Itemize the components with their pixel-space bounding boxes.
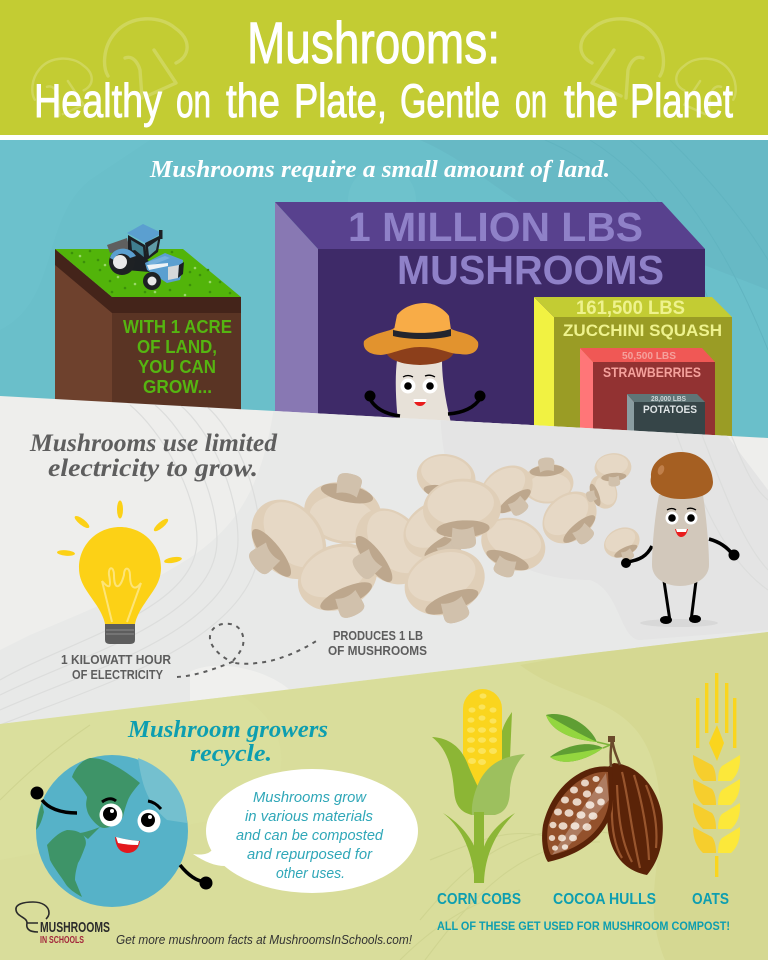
character: mushroom with legs xyxy=(599,452,740,627)
heading: land: Mushrooms require a small amount of land. xyxy=(149,157,610,183)
held mushroom xyxy=(599,522,647,568)
title xyxy=(34,11,733,127)
block: mushrooms: MUSHROOMS xyxy=(397,247,664,293)
label: produces 1 lb xyxy=(328,629,427,658)
callout: speech bubble: and can be composted xyxy=(236,828,384,844)
title: Gentle xyxy=(400,74,500,127)
heading: electricity: electricity to grow. xyxy=(48,455,258,482)
background: teal land section xyxy=(0,140,768,460)
callout: speech bubble: in various materials xyxy=(245,809,373,825)
icon: tractor xyxy=(107,224,184,290)
heading: recycle: recycle. xyxy=(190,741,272,767)
labels: compost materials: OATS xyxy=(692,891,729,908)
land label: GROW... xyxy=(143,377,212,397)
icon: light bulb xyxy=(57,500,182,644)
block: zucchini squash: ZUCCHINI SQUASH xyxy=(563,321,722,340)
title: Planet xyxy=(630,74,733,127)
callout: speech bubble xyxy=(193,769,418,893)
block: strawberries: STRAWBERRIES xyxy=(603,364,701,380)
labels: compost materials: CORN COBS xyxy=(437,891,521,908)
icon: corn xyxy=(432,689,525,883)
land label: OF LAND, xyxy=(137,337,217,357)
block: mushrooms xyxy=(275,202,705,444)
label: produces 1 lb: OF MUSHROOMS xyxy=(328,644,427,658)
label: kilowatt hour xyxy=(61,653,171,682)
block: potatoes: 28,000 LBS xyxy=(651,396,686,403)
arrow: dashed path xyxy=(177,624,318,677)
icon: oats xyxy=(693,673,740,877)
character: earth globe xyxy=(30,755,212,907)
label: kilowatt hour: OF ELECTRICITY xyxy=(72,668,164,682)
block: potatoes xyxy=(627,394,705,445)
character: farmer mushroom xyxy=(364,303,486,440)
text: footer: Get more mushroom facts at MushroomsInSchools.com! xyxy=(116,933,412,947)
title: the xyxy=(564,74,618,127)
icon: header mushrooms right xyxy=(581,19,736,116)
block: strawberries xyxy=(580,348,715,445)
title: Healthy xyxy=(34,74,162,127)
heading: recycle: Mushroom growers xyxy=(127,717,328,743)
block: strawberries: 50,500 LBS xyxy=(622,350,676,362)
land top grass xyxy=(55,249,241,297)
text: compost note: ALL OF THESE GET USED FOR MUSHROOM COMPOST! xyxy=(437,919,730,933)
header band xyxy=(0,0,768,140)
label: kilowatt hour: 1 KILOWATT HOUR xyxy=(61,653,171,667)
title: Plate, xyxy=(294,74,387,127)
title: the xyxy=(226,74,280,127)
land block xyxy=(55,224,241,420)
block: mushrooms: 1 MILLION LBS xyxy=(348,204,643,250)
land label xyxy=(123,317,232,397)
panel: recycle background xyxy=(0,620,768,960)
logo: Mushrooms in Schools: MUSHROOMS xyxy=(40,919,110,936)
logo: Mushrooms in Schools xyxy=(16,902,110,946)
heading: electricity: Mushrooms use limited xyxy=(29,430,277,457)
callout: speech bubble: other uses. xyxy=(276,866,345,882)
block: zucchini squash: 161,500 LBS xyxy=(576,297,685,319)
title: on xyxy=(176,74,211,127)
title: Mushrooms: xyxy=(247,11,500,76)
labels: compost materials: COCOA HULLS xyxy=(553,891,656,908)
land label: WITH 1 ACRE xyxy=(123,317,232,337)
callout: speech bubble: Mushrooms grow xyxy=(253,790,368,806)
callout: speech bubble: and repurposed for xyxy=(247,847,373,863)
label: produces 1 lb: PRODUCES 1 LB xyxy=(333,629,423,643)
heading: recycle xyxy=(127,717,328,767)
block: potatoes: POTATOES xyxy=(643,404,697,416)
logo: Mushrooms in Schools: IN SCHOOLS xyxy=(40,934,84,946)
labels: compost materials xyxy=(437,891,729,908)
heading: electricity xyxy=(29,430,277,482)
land label: YOU CAN xyxy=(138,357,216,377)
icon: header mushrooms left xyxy=(32,19,187,116)
hat xyxy=(364,303,478,365)
panel: electricity background xyxy=(0,390,768,730)
illustration: pile of mushrooms xyxy=(228,449,633,636)
title: on xyxy=(515,74,547,127)
block: zucchini squash xyxy=(534,297,732,445)
icon: cocoa pods xyxy=(542,714,663,875)
